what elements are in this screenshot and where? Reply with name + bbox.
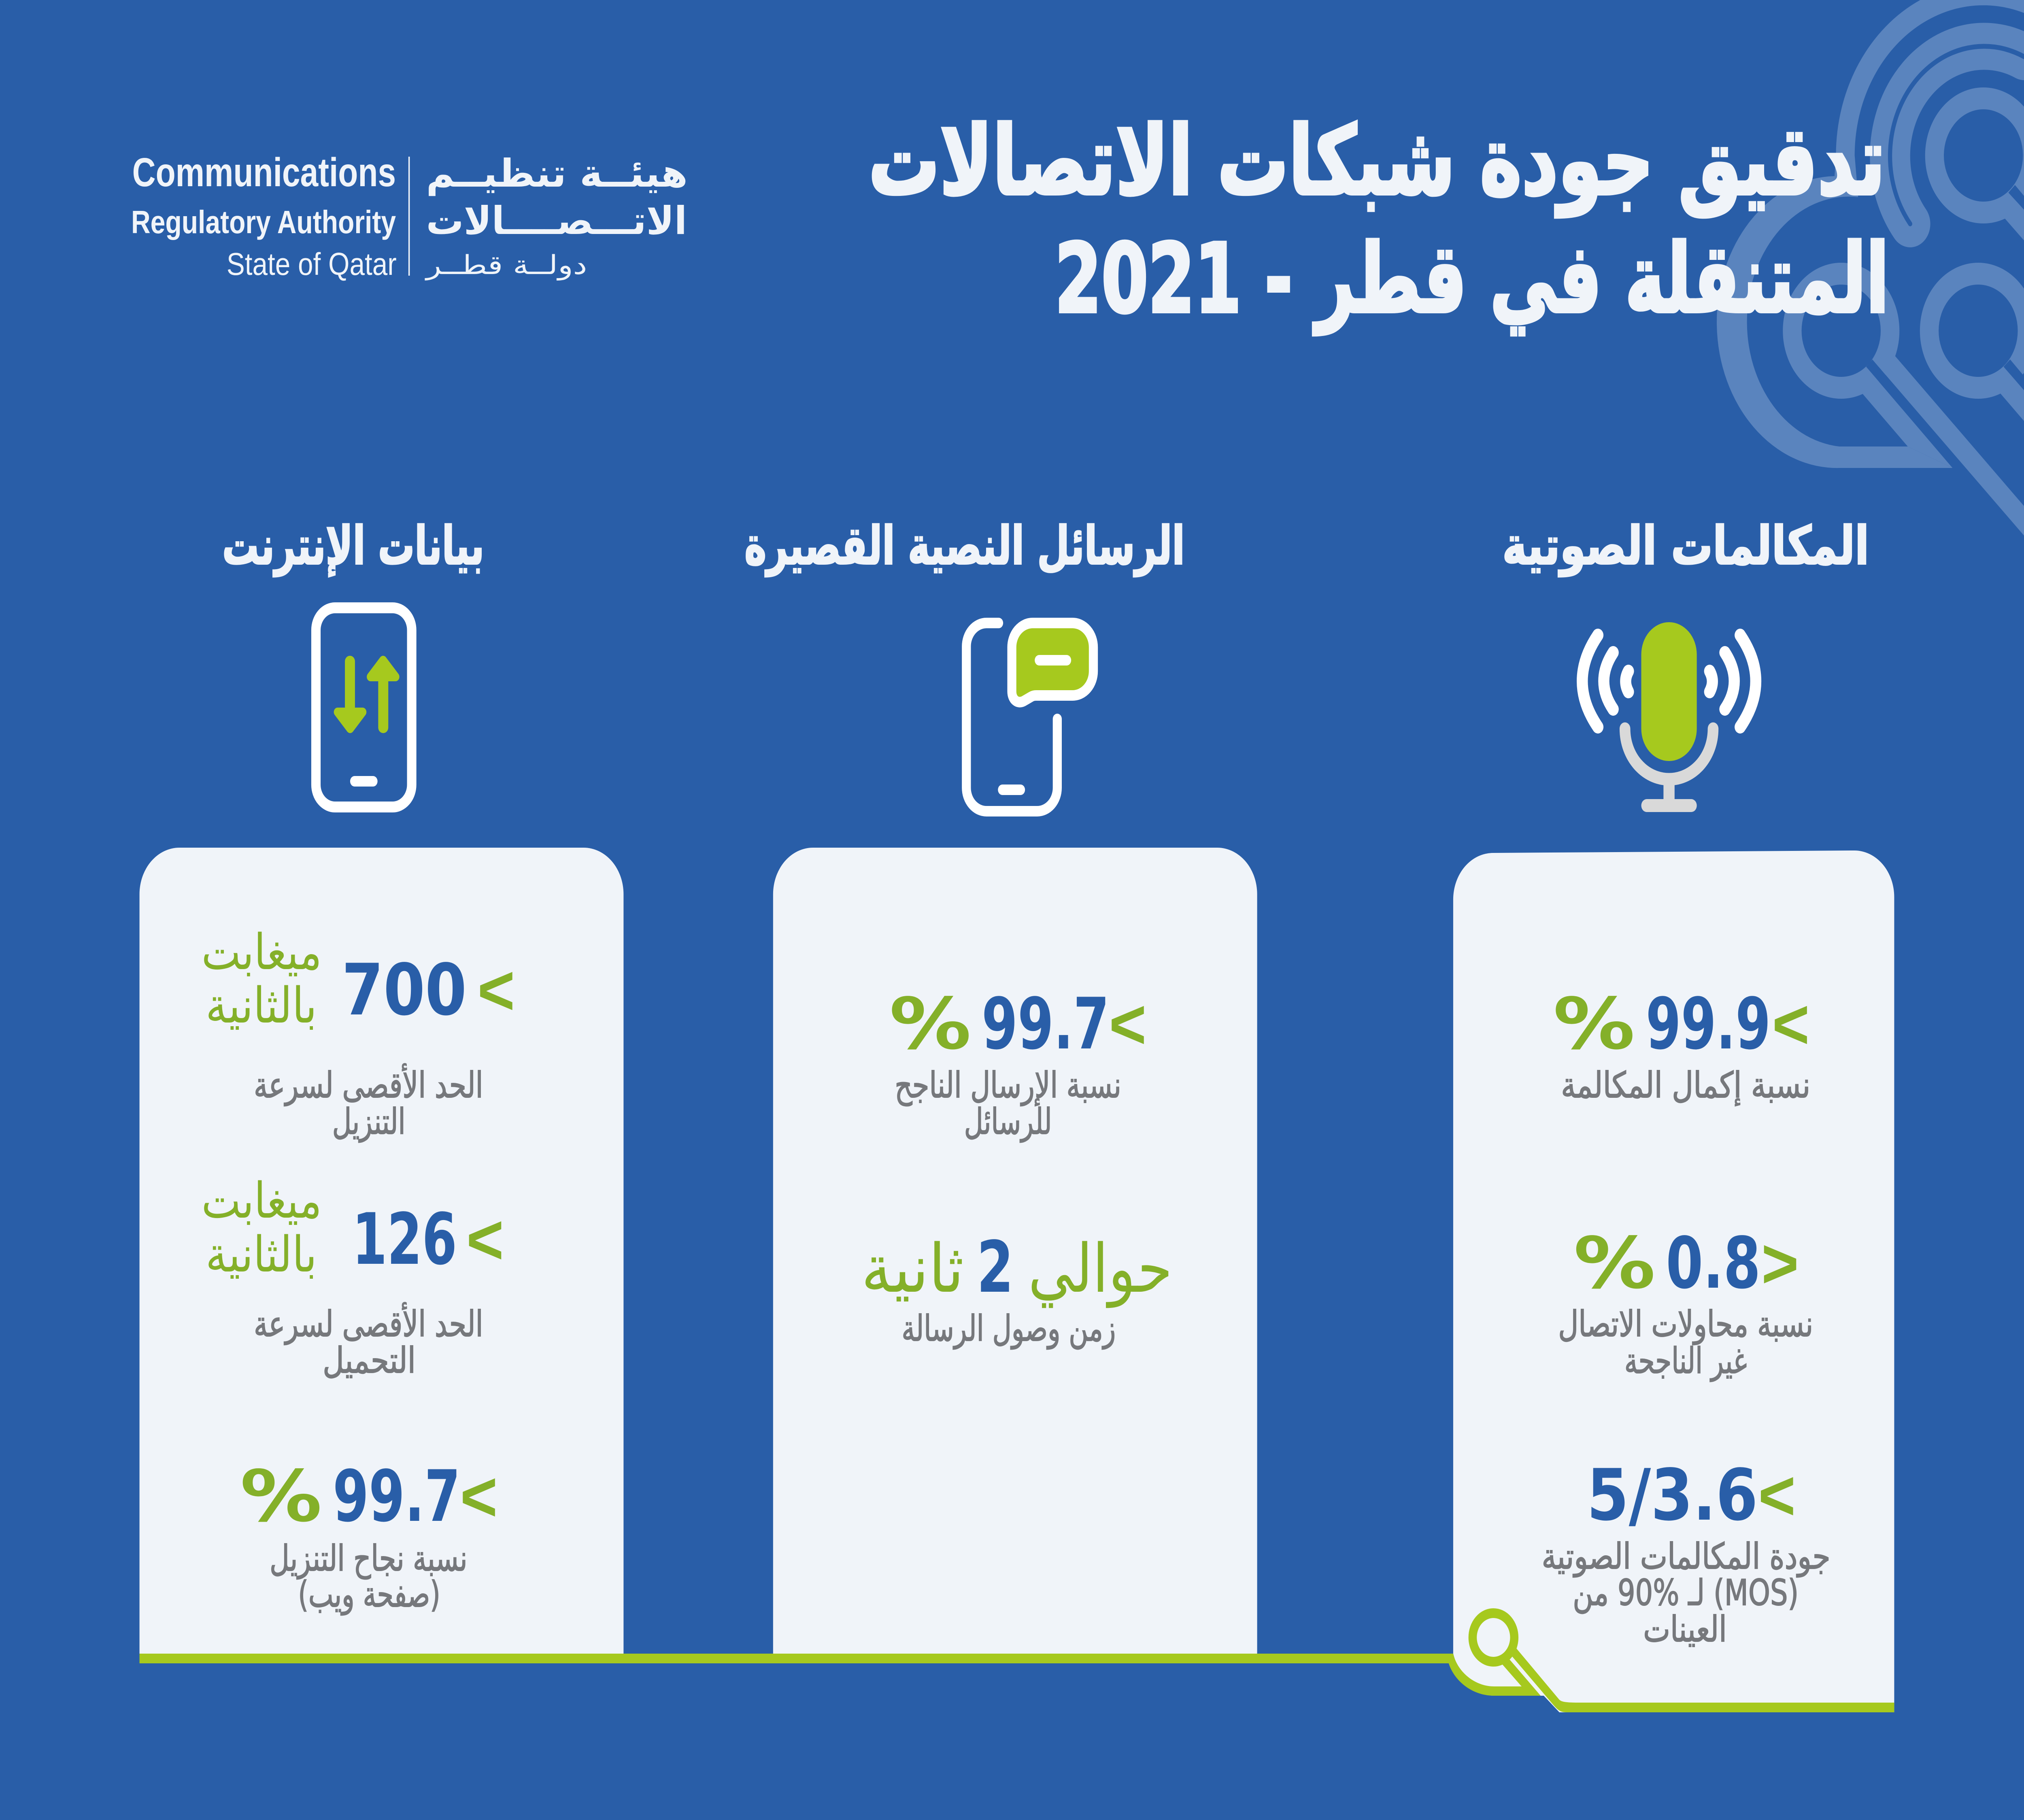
stat: download success rate: نسبة نجاح التنزيل xyxy=(270,1538,468,1579)
stat: max upload speed: الحد الأقصى لسرعة xyxy=(254,1302,483,1345)
title: تدقيق جودة شبكات الاتصالات xyxy=(869,106,1885,217)
logo: Communications Regulatory Authority: Regulatory Authority xyxy=(131,204,396,240)
stat: message delivery time xyxy=(861,1227,1172,1349)
title: المتنقلة في قطر - 2021 xyxy=(1055,223,1889,335)
decorative magnifier watermark xyxy=(1717,0,2024,536)
stat: call completion rate: 99.9 xyxy=(1646,983,1771,1065)
stat: failed call attempts: غير الناجحة xyxy=(1624,1340,1747,1382)
stat: SMS success rate: 99.7 xyxy=(982,983,1109,1065)
stat: max download speed: الحد الأقصى لسرعة xyxy=(254,1063,483,1106)
stat: call completion rate: % xyxy=(1553,983,1635,1065)
stat: failed call attempts: > xyxy=(1761,1223,1799,1303)
logo: Communications Regulatory Authority: الاتـــصــــالات xyxy=(426,198,687,243)
stat: call completion rate xyxy=(1553,983,1810,1107)
stat: SMS success rate: < xyxy=(1109,984,1146,1064)
stat: SMS success rate xyxy=(889,983,1146,1142)
heading: SMS: الرسائل النصية القصيرة xyxy=(744,515,1185,577)
stat: mean opinion score: < xyxy=(1758,1455,1796,1535)
stat: message delivery time: زمن وصول الرسالة xyxy=(901,1308,1116,1349)
stat: SMS success rate: للرسائل xyxy=(964,1101,1052,1142)
heading: internet data: بيانات الإنترنت xyxy=(222,515,484,577)
stat: max upload speed: بالثانية xyxy=(206,1226,317,1283)
icon: microphone xyxy=(1582,622,1756,812)
stat: max upload speed: ميغابت xyxy=(202,1172,322,1229)
stat: call completion rate: نسبة إكمال المكالمة xyxy=(1561,1065,1810,1107)
stat: max download speed: ميغابت xyxy=(202,923,322,981)
logo: Communications Regulatory Authority xyxy=(131,150,688,282)
logo: Communications Regulatory Authority: Communications xyxy=(132,150,396,195)
icon: phone with data arrows xyxy=(316,608,412,807)
logo: Communications Regulatory Authority: هيئــة تنظيــم xyxy=(426,151,688,196)
stat: failed call attempts xyxy=(1558,1223,1813,1382)
stat: SMS success rate: نسبة الإرسال الناجح xyxy=(895,1065,1121,1107)
stat: max download speed: 700 xyxy=(342,949,467,1031)
green baseline with magnifier xyxy=(140,1613,1894,1712)
stat: max download speed: بالثانية xyxy=(206,977,317,1034)
stat: max upload speed xyxy=(202,1172,504,1381)
stat: message delivery time: ثانية xyxy=(861,1230,964,1308)
stat: call completion rate: < xyxy=(1772,984,1809,1064)
heading: voice calls: المكالمات الصوتية xyxy=(1502,515,1869,577)
panel: SMS xyxy=(773,848,1257,1654)
stat: max download speed: التنزيل xyxy=(332,1101,406,1142)
stat: mean opinion score: (MOS) لـ %90 من xyxy=(1573,1572,1799,1614)
stat: download success rate: < xyxy=(460,1456,497,1536)
stat: failed call attempts: % xyxy=(1573,1223,1656,1305)
stat: failed call attempts: 0.8 xyxy=(1666,1223,1760,1305)
stat: message delivery time: حوالي xyxy=(1028,1230,1172,1308)
stat: mean opinion score: جودة المكالمات الصوتية xyxy=(1542,1536,1831,1577)
logo: Communications Regulatory Authority: دولــة قطــر xyxy=(425,250,587,281)
stat: download success rate: (صفحة ويب) xyxy=(298,1574,440,1615)
stat: download success rate xyxy=(240,1456,497,1615)
title xyxy=(869,106,1889,335)
panel: voice calls xyxy=(1453,850,1894,1712)
logo: Communications Regulatory Authority: State of Qatar xyxy=(227,247,397,282)
stat: message delivery time: 2 xyxy=(977,1227,1014,1309)
stat: mean opinion score: 5/3.6 xyxy=(1587,1454,1758,1537)
stat: max download speed: < xyxy=(477,950,515,1030)
stat: max upload speed: < xyxy=(466,1199,504,1279)
stat: max upload speed: التحميل xyxy=(323,1340,416,1381)
stat: SMS success rate: % xyxy=(889,983,971,1065)
stat: download success rate: 99.7 xyxy=(333,1456,460,1538)
icon: phone with message bubble xyxy=(966,623,1093,811)
stat: mean opinion score xyxy=(1542,1454,1831,1650)
stat: mean opinion score: العينات xyxy=(1643,1609,1727,1650)
stat: max download speed xyxy=(202,923,515,1142)
stat: max upload speed: 126 xyxy=(352,1199,457,1281)
stat: failed call attempts: نسبة محاولات الاتصال xyxy=(1558,1303,1813,1345)
panel: internet data xyxy=(140,848,623,1654)
stat: download success rate: % xyxy=(240,1456,322,1538)
